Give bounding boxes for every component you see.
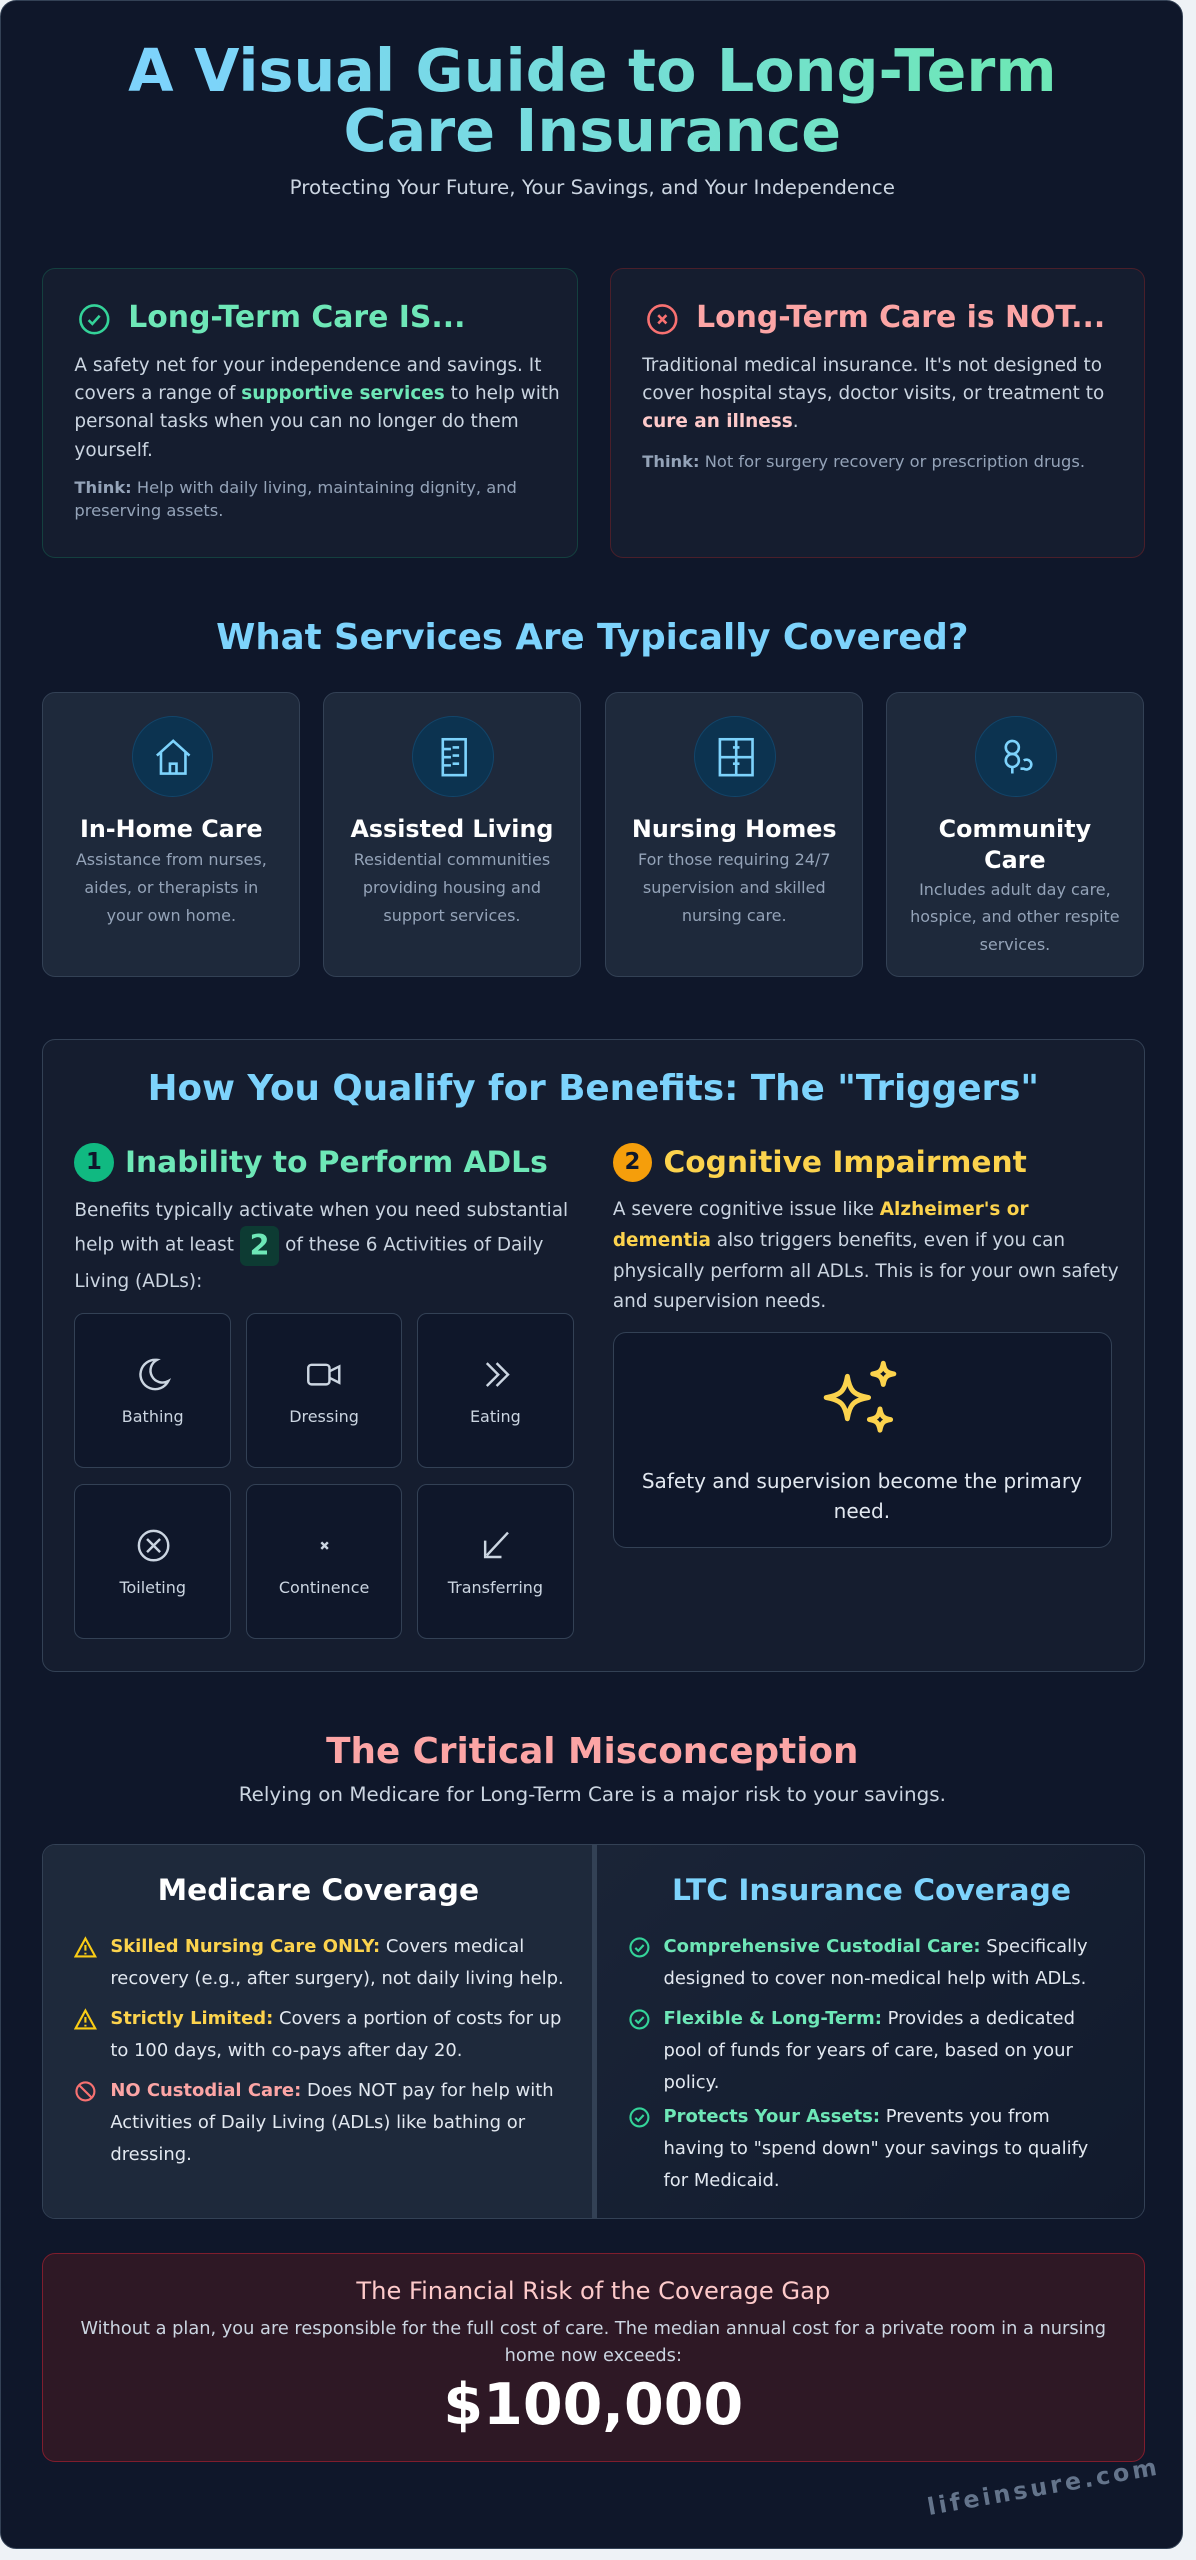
title: A Visual Guide to Long-Term xyxy=(128,36,1057,105)
callout: safety xyxy=(613,1332,1112,1548)
heading: LTC Insurance Coverage xyxy=(672,1873,1071,1908)
icon: sparkles xyxy=(824,1360,896,1433)
watermark: lifeinsure.com xyxy=(925,2453,1162,2521)
think note: Think: Not for surgery recovery or prescription drugs. xyxy=(642,452,1085,471)
ADL: bathing: Bathing xyxy=(122,1407,184,1426)
heading: services: What Services Are Typically Covered? xyxy=(216,617,968,658)
body text: Traditional medical insurance. It's not designed to cover hospital stays, doctor visits, or treatment to cure an illness. xyxy=(642,355,1104,432)
service card: nursing homes: For those requiring 24/7 supervision and skilled nursing care. xyxy=(638,850,831,925)
panel: financial risk xyxy=(42,2253,1145,2462)
trigger 1 text: 2 xyxy=(250,1228,269,1262)
ADL: continence: Continence xyxy=(279,1578,369,1597)
panel: LTC is xyxy=(42,268,578,558)
service card: community: Includes adult day care, hospice, and other respite services. xyxy=(910,880,1120,954)
heading: How You Qualify for Benefits: The "Triggers" xyxy=(148,1068,1039,1109)
service card: community: Care xyxy=(984,846,1046,874)
trigger 1 text: Benefits typically activate when you need substantial help with at least of these 6 Activities of Daily Living (ADLs): xyxy=(74,1200,568,1292)
service card: nursing homes xyxy=(605,692,863,977)
ADL: dressing: Dressing xyxy=(289,1407,359,1426)
icon: check circle xyxy=(79,304,110,334)
body: Without a plan, you are responsible for the full cost of care. The median annual cost for a private room in a nursing home now exceeds: xyxy=(80,2318,1106,2366)
item: strictly limited: Strictly Limited: Covers a portion of costs for up to 100 days, with co-pays after day 20. xyxy=(110,2008,561,2061)
item: comprehensive: Comprehensive Custodial Care: Specifically designed to cover non-medical help with ADLs. xyxy=(663,1936,1088,1989)
trigger 1 heading: 1 xyxy=(86,1149,102,1175)
service card: assisted living: Assisted Living xyxy=(350,815,553,843)
heading: Medicare Coverage xyxy=(158,1873,479,1908)
title xyxy=(0,41,1185,162)
divider xyxy=(592,1845,597,2220)
service card: nursing homes: Nursing Homes xyxy=(632,815,837,843)
heading: Long-Term Care IS... xyxy=(128,300,465,335)
item: no custodial: NO Custodial Care: Does NOT pay for help with Activities of Daily Living (ADLs) like bathing or dressing. xyxy=(110,2080,554,2164)
service card: community xyxy=(886,692,1144,977)
subtitle: Protecting Your Future, Your Savings, and Your Independence xyxy=(290,176,895,199)
service card: in-home: In-Home Care xyxy=(80,815,263,843)
ADL: eating: Eating xyxy=(470,1407,521,1426)
callout text: Safety and supervision become the primary need. xyxy=(642,1469,1082,1523)
trigger 2 text: A severe cognitive issue like Alzheimer's or dementia also triggers benefits, even if you can physically perform all ADLs. This is for your own safety and supervision needs. xyxy=(613,1199,1119,1312)
service card: in-home: Assistance from nurses, aides, or therapists in your own home. xyxy=(76,850,267,925)
body text: A safety net for your independence and savings. It covers a range of supportive services to help with personal tasks when you can no longer do them yourself. xyxy=(74,355,560,460)
ADL: continence xyxy=(246,1484,402,1639)
big number: $100,000 xyxy=(443,2372,743,2438)
ADL: transferring: Transferring xyxy=(448,1578,543,1597)
item: flexible: Flexible & Long-Term: Provides a dedicated pool of funds for years of care, based on your policy. xyxy=(663,2008,1075,2093)
panel: LTC is not xyxy=(610,268,1145,558)
trigger 2 heading: Cognitive Impairment xyxy=(663,1145,1027,1180)
icon: cabinet xyxy=(694,716,776,797)
subtitle: misconception: Relying on Medicare for Long-Term Care is a major risk to your savings. xyxy=(239,1783,946,1806)
column: medicare xyxy=(43,1845,593,2220)
icon: building xyxy=(412,716,494,797)
service card: in-home xyxy=(42,692,300,977)
icon: people xyxy=(975,716,1057,797)
panel: comparison xyxy=(42,1844,1145,2219)
heading: Long-Term Care is NOT... xyxy=(696,300,1105,335)
panel: triggers xyxy=(42,1039,1145,1672)
item: skilled nursing: Skilled Nursing Care ONLY: Covers medical recovery (e.g., after surgery), not daily living help. xyxy=(110,1936,564,1989)
service card: assisted living: Residential communities providing housing and support services. xyxy=(354,850,550,925)
icon: house xyxy=(132,716,213,797)
item: protects assets: Protects Your Assets: Prevents you from having to "spend down" your savings to qualify for Medicaid. xyxy=(663,2106,1088,2191)
heading: misconception: The Critical Misconception xyxy=(326,1731,858,1772)
ADL: transferring xyxy=(417,1484,574,1639)
service card: community: Community xyxy=(939,815,1091,843)
trigger 1 heading: Inability to Perform ADLs xyxy=(125,1145,548,1180)
ADL: toileting xyxy=(74,1484,231,1639)
icon: x circle xyxy=(647,304,678,334)
heading: The Financial Risk of the Coverage Gap xyxy=(356,2277,830,2305)
ADL: toileting: Toileting xyxy=(119,1578,186,1597)
trigger 2 heading: 2 xyxy=(624,1149,640,1175)
ADL grid xyxy=(74,1313,574,1639)
ADL: bathing xyxy=(74,1313,231,1468)
ADL: dressing xyxy=(246,1313,402,1468)
ADL: eating xyxy=(417,1313,574,1468)
think note: Think: Help with daily living, maintaining dignity, and preserving assets. xyxy=(74,478,517,520)
column: LTC xyxy=(597,1845,1146,2220)
service card: assisted living xyxy=(323,692,581,977)
title: Care Insurance xyxy=(344,96,841,165)
